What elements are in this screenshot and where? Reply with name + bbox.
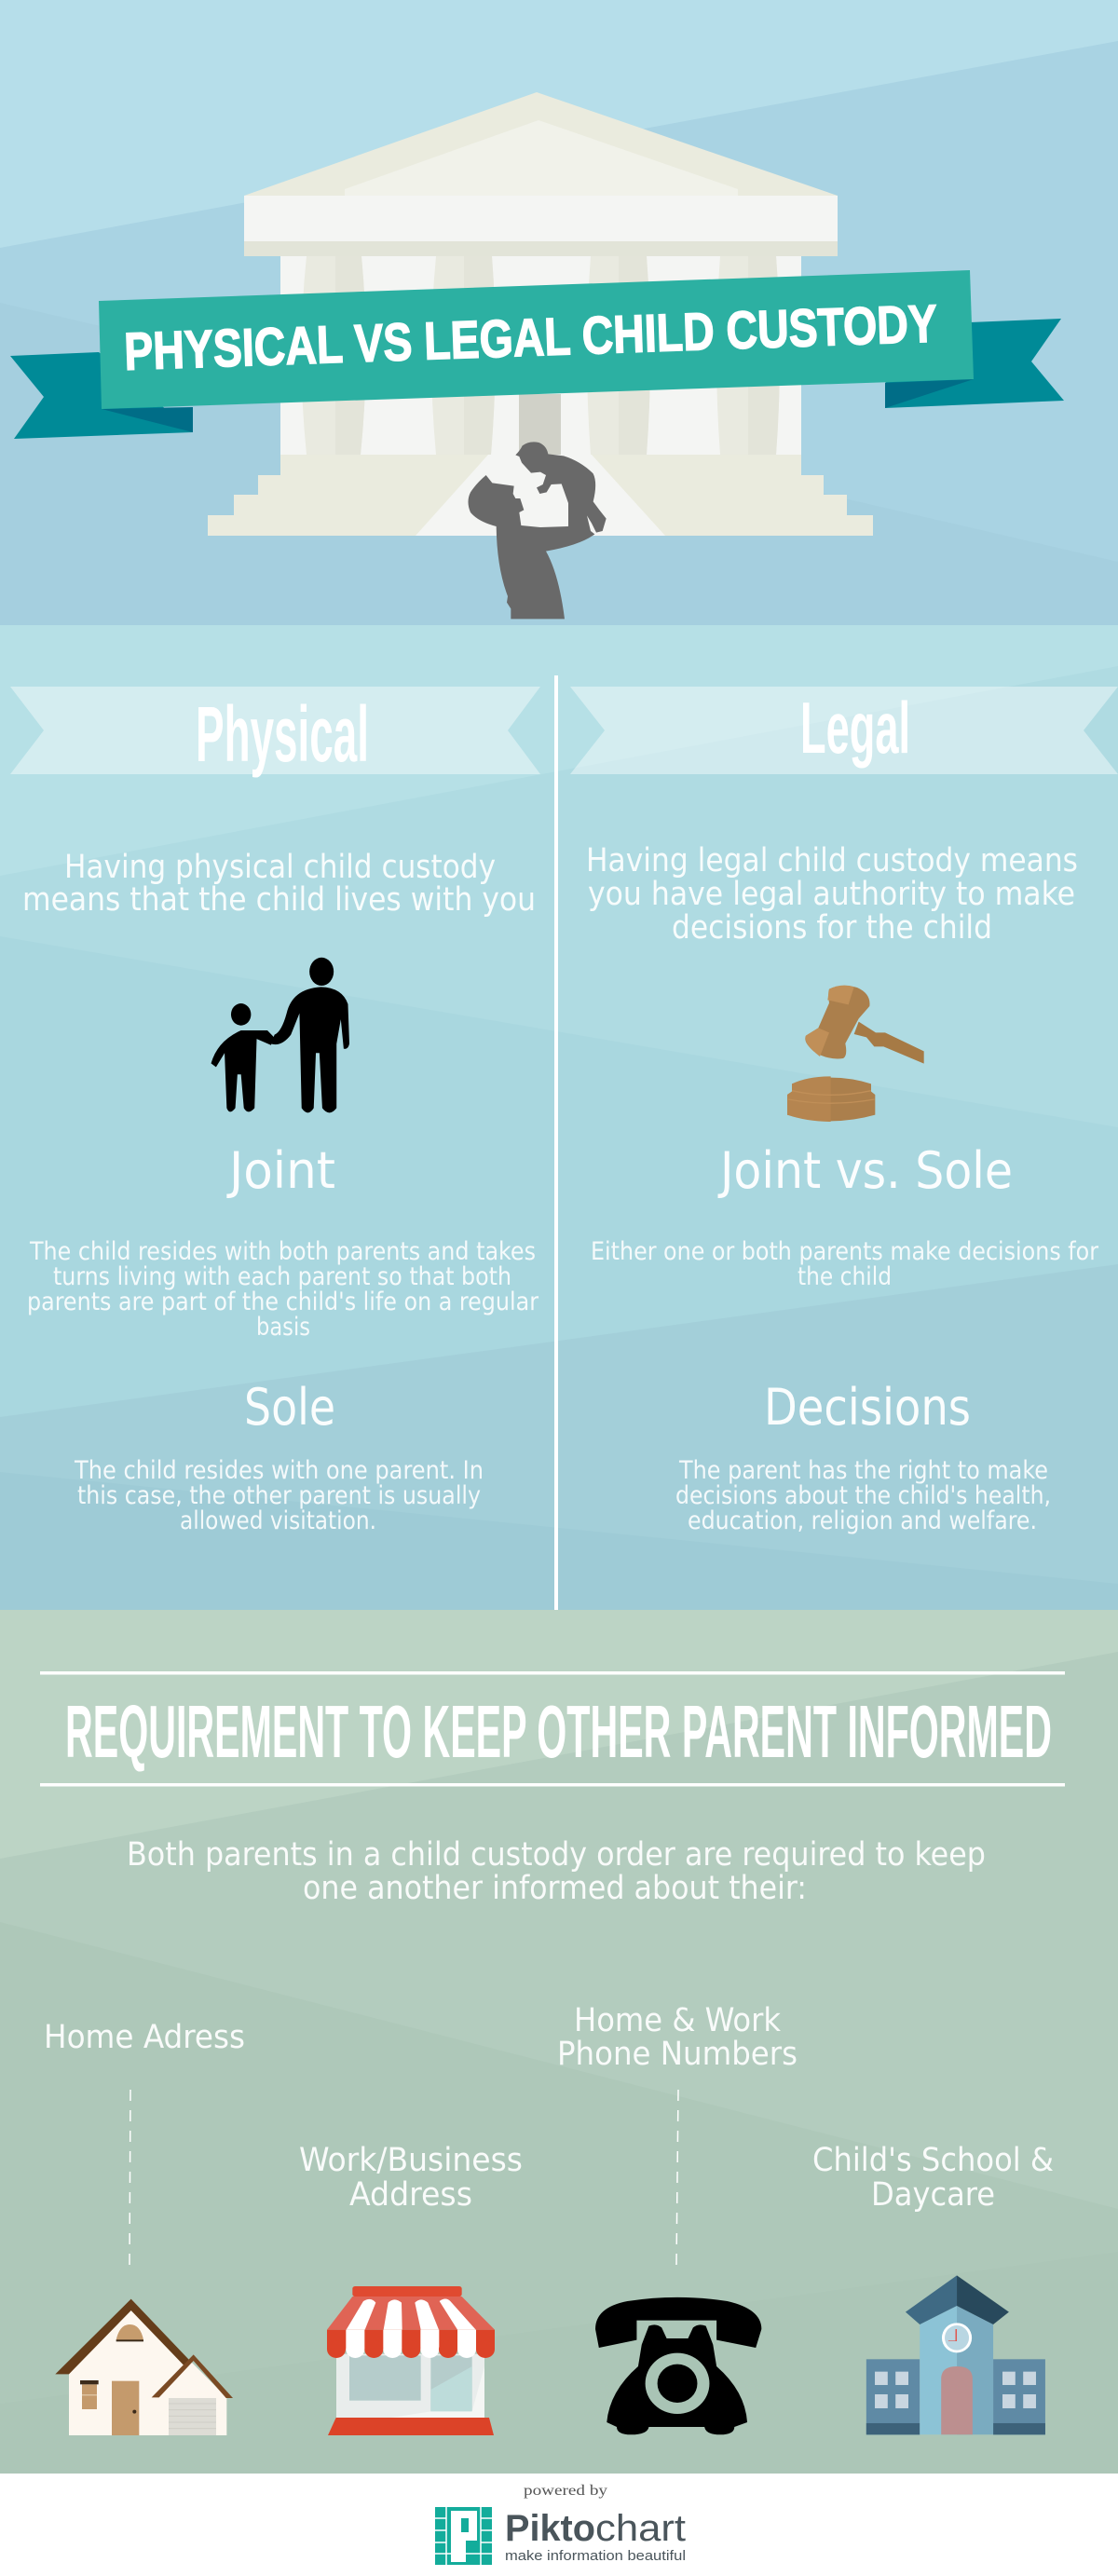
text: legal intro: you have legal authority to make (588, 876, 1075, 913)
text: requirement intro: one another informed about their: (303, 1870, 807, 1907)
title: PHYSICAL VS LEGAL CHILD CUSTODY (123, 294, 938, 382)
ribbon: legal heading: Legal (800, 687, 910, 769)
text: decisions description: decisions about the child's health, (675, 1481, 1051, 1510)
label: school and daycare: Child's School & (812, 2142, 1054, 2179)
label: work address: Work/Business (299, 2142, 523, 2179)
text: joint description: The child resides with both parents and takes (29, 1237, 536, 1266)
heading: sole: Sole (244, 1378, 335, 1437)
text: piktochart wordmark: make information beautiful (505, 2548, 686, 2564)
label: work address (299, 2142, 523, 2214)
ribbon: legal heading (570, 687, 1118, 774)
text: decisions description: The parent has the right to make (678, 1456, 1048, 1485)
text: piktochart wordmark: Pikto (505, 2508, 595, 2549)
label: phone numbers: Home & Work (574, 2002, 782, 2039)
text: piktochart wordmark (505, 2508, 686, 2564)
icon: courthouse (208, 92, 873, 536)
label: school and daycare: Daycare (871, 2176, 995, 2214)
text: requirement intro: Both parents in a child custody order are required to keep (127, 1836, 986, 1874)
label: home address: Home Adress (44, 2019, 245, 2056)
text: joint description: basis (256, 1313, 310, 1342)
text: physical intro (22, 849, 536, 919)
icon: gavel (787, 986, 924, 1122)
icon: storefront (327, 2286, 495, 2435)
text: physical intro: Having physical child custody (64, 849, 496, 886)
icon: father lifting child silhouette (468, 442, 607, 619)
text: legal intro (586, 842, 1078, 947)
ribbon: physical heading (10, 687, 540, 778)
panel: footer (0, 2474, 1118, 2576)
icon: piktochart logo (435, 2507, 492, 2565)
text: joint description (27, 1237, 539, 1342)
panel: hero background (0, 0, 1118, 625)
text: joint vs sole description (591, 1237, 1098, 1291)
heading: decisions: Decisions (764, 1378, 971, 1437)
text: decisions description (675, 1456, 1051, 1535)
text: decisions description: education, religion and welfare. (688, 1506, 1037, 1535)
text: powered by: powered by (524, 2483, 607, 2499)
ribbon: physical heading: Physical (196, 690, 369, 778)
connector: phone numbers (676, 2090, 678, 2266)
label: work address: Address (349, 2176, 472, 2214)
divider (554, 675, 558, 1610)
text: physical intro: means that the child lives with you (22, 881, 536, 919)
icon: parent and child (211, 958, 349, 1112)
icon: house (55, 2299, 233, 2435)
text: sole description: this case, the other parent is usually (77, 1481, 481, 1510)
label: school and daycare (812, 2142, 1054, 2214)
panel: physical and legal background (0, 625, 1118, 1610)
heading: requirement (40, 1671, 1065, 1787)
text: piktochart wordmark: chart (595, 2508, 686, 2549)
banner: title ribbon (10, 270, 1064, 439)
text: legal intro: decisions for the child (672, 909, 992, 947)
heading: joint: Joint (226, 1141, 335, 1200)
label: phone numbers: Phone Numbers (557, 2036, 798, 2073)
heading: joint vs sole: Joint vs. Sole (717, 1141, 1013, 1200)
icon: telephone (595, 2297, 761, 2434)
label: phone numbers (557, 2002, 798, 2073)
text: sole description: The child resides with one parent. In (74, 1456, 484, 1485)
text: requirement intro (127, 1836, 986, 1907)
icon: school (866, 2275, 1045, 2434)
text: joint vs sole description: Either one or both parents make decisions for (591, 1237, 1098, 1266)
text: joint description: turns living with each parent so that both (53, 1262, 511, 1291)
text: sole description (74, 1456, 484, 1535)
panel: legal column (570, 687, 1118, 1535)
text: joint vs sole description: the child (798, 1262, 892, 1291)
panel: physical column (10, 687, 540, 1535)
text: joint description: parents are part of the child's life on a regular (27, 1288, 539, 1316)
text: legal intro: Having legal child custody means (586, 842, 1078, 879)
text: sole description: allowed visitation. (180, 1506, 376, 1535)
panel: requirement background (0, 1610, 1118, 2474)
